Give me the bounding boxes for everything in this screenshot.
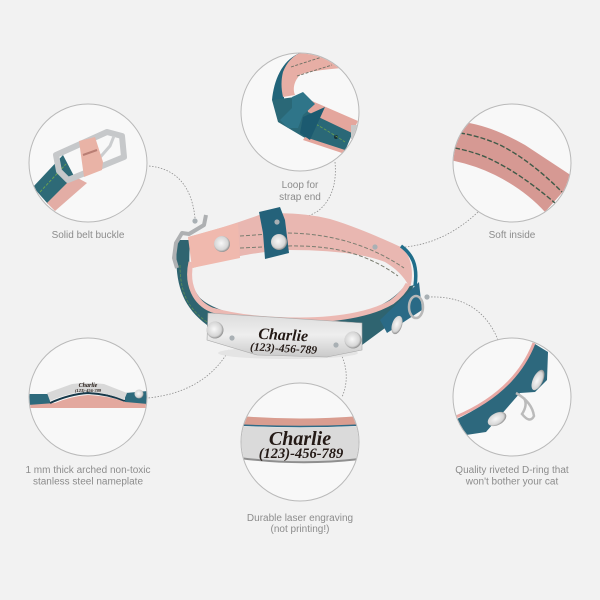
rivet	[134, 390, 144, 398]
panel: arched nameplate: (123)-456-789	[75, 388, 102, 393]
strap	[33, 155, 75, 204]
leader: loop to collar	[279, 162, 335, 222]
panel: loop for strap end	[241, 53, 359, 171]
pink inner strap	[188, 213, 412, 288]
panel: riveted D-ring	[453, 338, 571, 456]
label: D-ring: Quality riveted D-ring that	[455, 465, 569, 476]
label: laser engraving: Durable laser engraving	[247, 513, 353, 524]
nameplate	[207, 313, 362, 357]
leader: soft inside to collar	[405, 212, 478, 247]
label: loop for strap end: Loop for	[282, 180, 319, 191]
nameplate text: (123)-456-789	[250, 341, 318, 357]
loop	[259, 207, 289, 259]
rivet: loop	[271, 234, 287, 250]
panel: soft inside	[450, 104, 575, 222]
strap	[455, 344, 548, 435]
rivet: strap	[214, 236, 230, 252]
strap	[28, 391, 148, 405]
label: solid belt buckle: Solid belt buckle	[52, 230, 125, 241]
pink tab	[79, 137, 103, 177]
pink front rim	[190, 262, 408, 320]
upper strap pink	[282, 53, 342, 97]
label: laser engraving	[247, 513, 353, 535]
panel: laser engraving	[240, 383, 360, 501]
outer stitching	[180, 265, 207, 322]
soft shadow	[218, 347, 358, 359]
D-ring	[516, 393, 534, 420]
label: D-ring: won't bother your cat	[465, 476, 558, 488]
panel: arched nameplate	[28, 338, 148, 456]
label: soft inside: Soft inside	[489, 230, 536, 241]
leather tab	[188, 223, 240, 268]
buckle frame	[56, 132, 124, 180]
engraved text: Charlie	[269, 428, 331, 450]
leader: buckle to collar	[149, 166, 195, 218]
leader: engraving to collar	[341, 354, 346, 397]
label: nameplate	[25, 465, 151, 488]
panel: laser engraving: (123)-456-789	[259, 446, 343, 462]
buckle	[174, 215, 206, 268]
stitches	[460, 133, 562, 192]
main collar	[174, 207, 430, 359]
rivet: D-ring	[389, 314, 405, 336]
label: loop for strap end: strap end	[279, 192, 321, 203]
upper strap teal edge	[272, 54, 300, 100]
nameplate	[47, 383, 127, 401]
inner stitching	[240, 233, 404, 276]
label: nameplate: stanless steel nameplate	[33, 476, 143, 488]
nameplate text: Charlie	[258, 326, 309, 345]
steel plate	[240, 426, 360, 462]
lower strap	[272, 97, 353, 151]
strap outer teal	[176, 240, 414, 352]
leader dots	[192, 218, 430, 348]
rivets	[488, 412, 506, 426]
pink rim	[456, 343, 534, 417]
label: nameplate: 1 mm thick arched non-toxic	[25, 465, 151, 476]
D-ring tab	[380, 282, 422, 333]
pink edge	[244, 416, 356, 426]
engraved text: Charlie	[79, 383, 98, 389]
label: loop for strap end	[279, 180, 321, 203]
D-ring	[409, 296, 423, 318]
leader: D-ring to collar	[428, 297, 498, 340]
loop back	[300, 107, 325, 140]
loop front	[280, 92, 315, 128]
label: D-ring	[455, 465, 569, 488]
pink lining	[454, 123, 570, 212]
label: laser engraving: (not printing!)	[271, 524, 329, 535]
teal edge	[401, 246, 416, 286]
nameplate text	[250, 325, 318, 357]
panel: solid belt buckle	[29, 104, 147, 222]
leader: nameplate to collar	[148, 350, 229, 398]
